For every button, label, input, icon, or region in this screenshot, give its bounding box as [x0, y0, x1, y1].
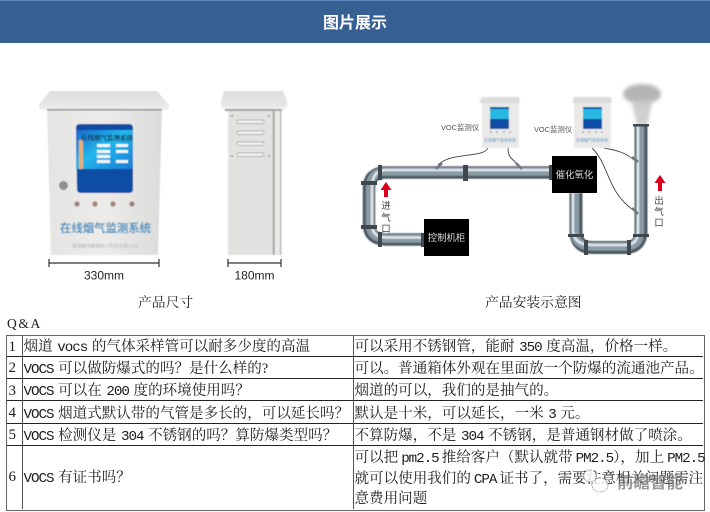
row 5: 5: [8, 427, 16, 443]
inlet arrow: [380, 182, 392, 197]
sensor wires: [438, 148, 634, 210]
pipe flanges: [361, 124, 649, 255]
indicator lights: [74, 201, 135, 207]
row 1: 烟道 vocs 的气体采样管可以耐多少度的高温: [24, 339, 310, 356]
row 1: 1: [8, 339, 16, 355]
catalytic oxidation box: [552, 156, 597, 193]
catalytic oxidation box: 催化氧化: [556, 169, 593, 180]
row 6: 意费用问题: [354, 491, 427, 507]
header banner: 图片展示: 图片展示: [323, 15, 387, 32]
outlet pipe: [573, 125, 641, 248]
outlet label: 气: [654, 206, 664, 218]
row 6: 6: [8, 468, 16, 484]
row 1: [7, 336, 703, 356]
outlet label: [654, 195, 664, 229]
VOC monitor left: 在线烟气监测系统: [484, 136, 516, 142]
installation diagram: [361, 84, 666, 256]
inlet label: 气: [381, 212, 391, 224]
width dimension 330mm: 330mm: [84, 268, 124, 282]
VOC monitor right: [572, 97, 612, 148]
screen: 在线烟气监测系统: [81, 133, 134, 142]
row 2: 可以。普通箱体外观在里面放一个防爆的流通池产品。: [354, 361, 704, 377]
VOC monitor left: [479, 97, 520, 148]
row 6: 可以把 pm2.5 推给客户（默认就带 PM2.5），加上 PM2.5: [354, 450, 705, 467]
caption: product size: 产品尺寸: [138, 295, 193, 310]
outlet arrow: [654, 175, 666, 191]
row 3: 烟道的可以，我们的是抽气的。: [354, 382, 558, 398]
row 3: 3: [8, 382, 16, 398]
front view cabinet: [39, 91, 169, 255]
row 6: [8, 449, 705, 507]
VOC monitor right: 在线烟气监测系统: [576, 136, 608, 142]
row 6: VOCS 有证书吗？: [24, 470, 131, 487]
sensor probes: [436, 157, 638, 214]
Q&A heading: Q&A: [7, 316, 42, 331]
row 5: [7, 424, 703, 446]
row 5: 不算防爆，不是 304 不锈钢，是普通钢材做了喷涂。: [354, 428, 692, 445]
VOC monitor label right: VOC监测仪: [534, 125, 573, 134]
width dimension 180mm: [228, 259, 281, 282]
row 2: [7, 356, 703, 379]
side view cabinet: [221, 91, 287, 255]
outlet label: 出: [654, 195, 664, 207]
inlet label: 口: [381, 224, 391, 235]
width dimension 180mm: 180mm: [234, 268, 275, 282]
row 3: [7, 379, 703, 401]
VOC monitor label left: VOC监测仪: [441, 123, 480, 132]
row 4: [7, 401, 703, 424]
screen: [76, 124, 134, 193]
row 3: VOCS 可以在 200 度的环境使用吗？: [24, 382, 250, 400]
Q&A table: [6, 334, 705, 510]
company line: 威海精讯畅通电子科技有限公司: [72, 242, 138, 250]
knob: [59, 181, 68, 190]
width dimension 330mm: [49, 259, 159, 282]
inlet label: [381, 201, 391, 235]
row 5: VOCS 检测仪是 304 不锈钢的吗？算防爆类型吗？: [24, 428, 337, 445]
control cabinet box: 控制机柜: [428, 232, 465, 243]
smoke: [623, 84, 661, 125]
outlet label: 口: [654, 218, 664, 229]
caption: installation diagram: 产品安装示意图: [485, 295, 582, 310]
cabinet name: 在线烟气监测系统: [60, 221, 152, 235]
header banner: 图片展示: [0, 0, 710, 43]
row 2: 2: [8, 360, 16, 376]
watermark: 前瞻智能: [617, 474, 683, 492]
control cabinet box: [424, 219, 469, 256]
row 4: VOCS 烟道式默认带的气管是多长的，可以延长吗？: [24, 406, 349, 422]
row 4: 默认是十米，可以延长，一米 3 元。: [354, 406, 589, 422]
row 6: 就可以使用我们的 CPA 证书了，需要注意相关问题需注: [354, 470, 703, 488]
inlet pipe: [369, 170, 552, 240]
row 1: 可以采用不锈钢管，能耐 350 度高温，价格一样。: [354, 339, 677, 356]
inlet label: 进: [381, 201, 391, 212]
row 4: 4: [8, 404, 16, 420]
row 2: VOCS 可以做防爆式的吗？是什么样的?: [24, 361, 268, 378]
